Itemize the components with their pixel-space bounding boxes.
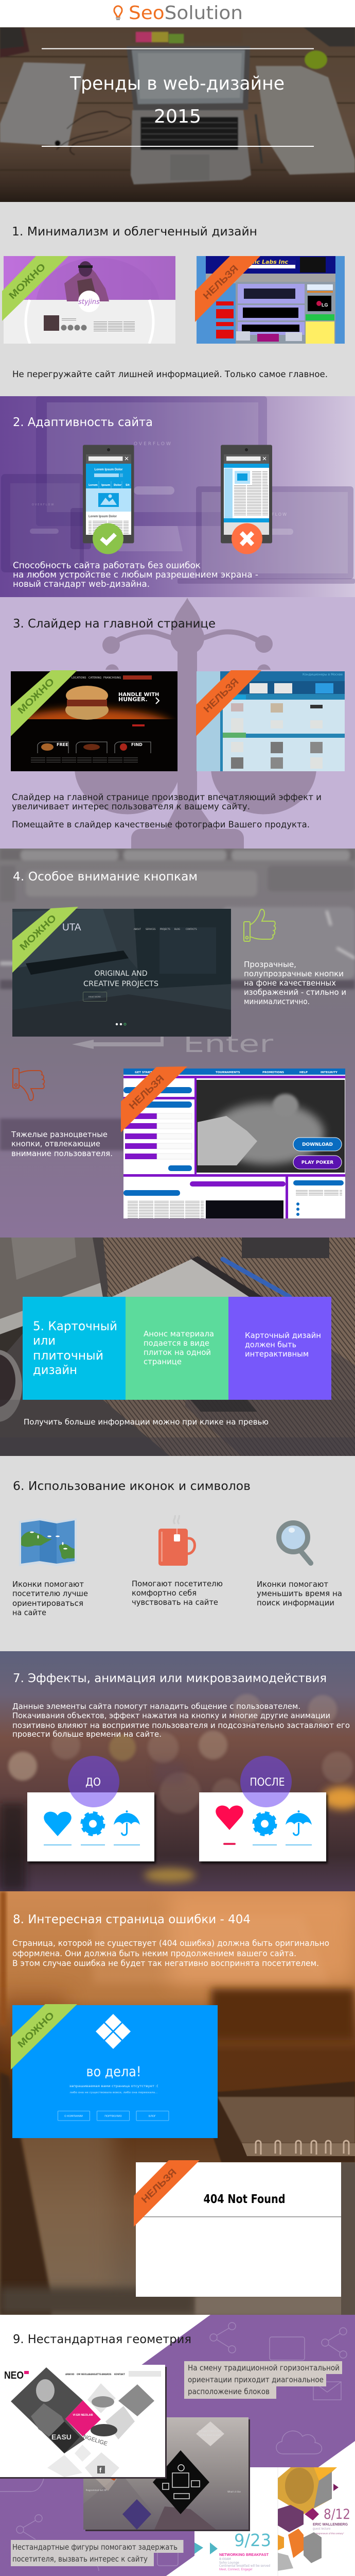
title: Тренды в web-дизайне	[69, 73, 285, 94]
icon: heart	[44, 1811, 72, 1836]
screenshot: transparent buttons site: READ MORE	[88, 995, 101, 998]
heading 1: 1. Минимализм и облегченный дизайн	[12, 225, 257, 239]
heading 6: 6. Использование иконок и символов	[13, 1480, 251, 1493]
ribbon: cannot: НЕЛЬЗЯ	[139, 2167, 179, 2206]
panel: 8 error page	[0, 1891, 355, 2508]
screenshot: NEO diamonds front: VI ER NEOLAB	[73, 2414, 93, 2417]
text: mug: чувствовать на сайте	[132, 1598, 218, 1607]
screenshot: mosaic layout back: 8:00AM	[219, 2557, 231, 2561]
panel: 4 buttons	[0, 849, 355, 1238]
ribbon: cannot	[196, 670, 261, 736]
text: magnifier: Иконки помогают	[257, 1580, 328, 1589]
text 7	[12, 1702, 350, 1739]
screenshot: cluttered conditioners store: Кондиционеры в Москве	[303, 673, 343, 676]
card: announce tile	[126, 1297, 228, 1400]
icon: cross badge	[232, 523, 262, 554]
panel: hero with desk photo	[0, 27, 355, 202]
text: thumb down: кнопки, отвлекающие	[11, 1139, 100, 1148]
screenshot: burger slider	[8, 671, 177, 771]
screenshot: creative 404: О КОМПАНИИ	[64, 2115, 83, 2118]
heading 3: 3. Слайдер на главной странице	[13, 617, 216, 631]
screenshot: plain 404: 404 Not Found	[204, 2193, 285, 2206]
icon: red heart	[216, 1805, 243, 1830]
icon: gear	[82, 1812, 104, 1835]
card: before	[27, 1792, 154, 1861]
screenshot: casino site with heavy buttons: PROMOTIONS	[262, 1071, 284, 1074]
icon: thumb up	[244, 909, 275, 941]
ribbon: can: МОЖНО	[7, 262, 48, 301]
text 8	[12, 1938, 329, 1968]
text 8: оформлена. Они должна быть неким продолжением вашего сайта.	[12, 1948, 296, 1958]
callout: figures	[11, 2540, 183, 2566]
text: magnifier: уменьшить время на	[257, 1589, 342, 1598]
background keyboard Enter legend	[72, 1030, 273, 1058]
text: thumb up: изображений - стильно и	[244, 988, 346, 997]
card: interactive tile: Карточный дизайн	[245, 1331, 321, 1340]
text: magnifier: поиск информации	[257, 1598, 334, 1607]
screenshot: burger slider: FRANCHISING	[103, 676, 121, 680]
screenshot: transparent buttons site: ABOUT	[134, 928, 141, 930]
screenshot: diamonds layout middle: What's it like	[227, 2490, 241, 2493]
screenshot: bad cluttered site: nic Labs Inc	[251, 259, 289, 265]
ribbon: cannot	[195, 256, 260, 322]
screenshot: NEO diamonds front	[0, 2365, 165, 2477]
text: thumb down: внимание пользователя.	[11, 1149, 113, 1158]
panel: 9 non-standard geometry	[0, 2315, 355, 2576]
text 3: Помещайте в слайдер качественые фотографи Вашего продукта.	[12, 820, 310, 829]
badge: after: ПОСЛЕ	[250, 1776, 285, 1788]
text: map: ориентироваться	[12, 1599, 83, 1608]
screenshot: transparent buttons site: CREATIVE PROJECTS	[83, 980, 158, 988]
badge: after	[240, 1756, 292, 1807]
text: map: на сайте	[12, 1608, 46, 1617]
screenshot: diamonds layout middle: at the meet so wait	[200, 2434, 220, 2436]
screenshot: NEO diamonds front: AWARDS	[101, 2373, 112, 2376]
text: thumb down: Тяжелые разноцветные	[11, 1130, 108, 1139]
icon: phone good layout: Lorem	[88, 484, 98, 487]
screenshot: casino site with heavy buttons: INTEGRITY	[321, 1071, 338, 1074]
callout: figures: Нестандартные фигуры помогают задержать	[12, 2543, 177, 2552]
ribbon: can	[12, 907, 78, 973]
text: mug: Помогают посетителю	[132, 1579, 223, 1588]
card: heading tile: 5. Карточный	[33, 1319, 117, 1333]
screenshot: burger slider: FREE	[57, 742, 68, 747]
ribbon: cannot: НЕЛЬЗЯ	[127, 1073, 167, 1112]
screenshot: mosaic layout back: Meet, Connect, Engage!	[219, 2568, 253, 2571]
title	[69, 73, 285, 127]
screenshot: mosaic layout back: Continental breakfast will be served	[219, 2564, 270, 2568]
screenshot: cluttered conditioners store	[197, 671, 345, 771]
screenshot: creative 404: БЛОГ	[149, 2115, 156, 2118]
text: mug: комфортно себя	[132, 1588, 197, 1598]
screenshot: creative 404: ПОРТФОЛИО	[104, 2115, 122, 2118]
card: announce tile: странице	[144, 1357, 182, 1366]
screenshot: mosaic layout back: NETWORKING BREAKFAST	[219, 2552, 269, 2557]
screenshot: mosaic layout back: Soho Lounge	[219, 2561, 239, 2565]
screenshot: casino site with heavy buttons: PLAY POKER	[301, 1160, 333, 1165]
background keyboard Enter legend: Enter	[183, 1030, 273, 1058]
screenshot: mosaic layout back	[194, 2467, 355, 2576]
screenshot: bad cluttered site	[197, 256, 345, 344]
card: heading tile: или	[33, 1333, 56, 1348]
screenshot: mosaic layout back: guest lecture	[313, 2528, 331, 2531]
text: thumb up: Прозрачные,	[244, 960, 296, 969]
ribbon: cannot: НЕЛЬЗЯ	[202, 676, 241, 715]
screenshot: NEO diamonds front: OM NEOLAB	[77, 2373, 91, 2376]
text: thumb down	[11, 1130, 113, 1158]
background scale icon	[75, 598, 316, 849]
screenshot: bad cluttered site: LG	[322, 302, 328, 308]
callout: diagonal	[184, 2361, 342, 2399]
heading 9: 9. Нестандартная геометрия	[13, 2333, 191, 2346]
text: mug	[132, 1579, 223, 1607]
screenshot: mosaic layout back: 9/23	[234, 2530, 271, 2550]
icon: phone good layout: Lorem Ipsum Dolor	[94, 468, 123, 471]
ribbon: can: МОЖНО	[16, 2010, 57, 2050]
caption 1: Не перегружайте сайт лишней информацией. Только самое главное.	[12, 369, 328, 379]
badge: before: ДО	[85, 1776, 101, 1788]
icon: map	[19, 1518, 77, 1566]
screenshot: diamonds layout middle	[83, 2417, 248, 2530]
card: announce tile: Анонс материала	[144, 1329, 214, 1338]
hero rule top	[42, 48, 314, 49]
screenshot: burger slider: HUNGER.	[118, 696, 148, 703]
text 2: на любом устройстве с любым разрешением экрана -	[13, 570, 258, 580]
panel: 3 slider	[0, 597, 355, 849]
ribbon: cannot	[134, 2160, 200, 2227]
background outline icons	[0, 2323, 347, 2571]
panel: 2 responsive	[0, 396, 355, 597]
text 7: провести больше времени на сайте.	[12, 1730, 162, 1739]
card: heading tile	[23, 1297, 126, 1400]
text 3	[12, 792, 322, 829]
ribbon: can	[11, 2004, 77, 2070]
icon: phone good layout: Ipsum	[101, 484, 110, 487]
screenshot: burger slider: CATERING	[88, 676, 101, 680]
logo text: SeoSolution	[129, 3, 243, 24]
icon: thumb down	[13, 1069, 44, 1100]
screenshot: transparent buttons site	[12, 909, 231, 1037]
screenshot: creative 404: либо она не существовала вовсе, либо она переехала...	[70, 2091, 158, 2094]
icon: gear	[254, 1812, 276, 1835]
text: map: посетителю лучше	[12, 1589, 88, 1598]
text: thumb up: на фоне качественных	[244, 978, 336, 988]
screenshot: burger slider: LOCATIONS	[72, 676, 86, 680]
text 8: В этом случае ошибка не будет так негативно воспринята посетителем.	[12, 1958, 319, 1968]
ribbon: can: МОЖНО	[18, 913, 59, 953]
text 7: Покачивания объектов, эффект нажатия на кнопку и многие другие анимации	[12, 1711, 330, 1720]
text 3: Слайдер на главной странице производит впечатляющий эффект и	[12, 792, 322, 802]
icon: phone good layout: Lorem Ipsum Dolor	[88, 515, 117, 518]
background keyboard photo	[0, 849, 355, 1150]
title: 2015	[154, 106, 201, 127]
card: after	[199, 1792, 326, 1861]
card: announce tile: подается в виде	[144, 1338, 209, 1348]
icon underlines	[44, 1844, 140, 1845]
header: logo bar	[0, 0, 355, 27]
callout: diagonal: ориентации приходит диагональное	[188, 2375, 324, 2384]
screenshot: transparent buttons site: PROJECTS	[160, 928, 170, 930]
card: heading tile: дизайн	[33, 1363, 77, 1377]
shadow under diamonds image	[85, 2419, 250, 2531]
icon: magnifier	[279, 1523, 311, 1563]
panel: 5 card design	[0, 1238, 355, 1456]
text 2: новый стандарт web-дизайна.	[13, 579, 150, 589]
screenshot: NEO diamonds front: EASU	[51, 2433, 72, 2441]
ribbon: cannot	[121, 1066, 187, 1132]
icon underlines	[253, 1844, 312, 1845]
text 2	[13, 561, 258, 589]
screenshot: mosaic layout back: "entrepreneurs of this century"	[313, 2532, 344, 2535]
screenshot: casino site with heavy buttons: DOWNLOAD	[302, 1142, 333, 1147]
text: thumb up	[244, 960, 346, 1006]
ribbon: can	[2, 256, 68, 321]
icon: umbrella	[114, 1810, 140, 1835]
heading 8: 8. Интересная страница ошибки - 404	[13, 1913, 251, 1926]
screenshot: good minimal site: styjins	[78, 298, 100, 306]
callout: figures: посетителя, вызвать интерес к сайту	[12, 2554, 148, 2564]
screenshot: plain 404	[136, 2162, 341, 2297]
screenshot: NEO diamonds front: NEO	[4, 2370, 24, 2381]
screenshot: creative 404: запрашиваемая вами страница отсутствует :(	[69, 2084, 158, 2088]
badge: before	[68, 1756, 119, 1807]
icon: phone good layout: Sit	[126, 484, 130, 487]
screenshot: NEO diamonds front: f	[99, 2466, 102, 2474]
heading 7: 7. Эффекты, анимация или микровзаимодействия	[13, 1672, 327, 1685]
card: announce tile: плиток на одной	[144, 1348, 211, 1357]
text 7: позитивно влияют на восприятие пользователя и подсознательно заставляют его	[12, 1721, 350, 1730]
ribbon: can	[11, 670, 77, 736]
icon: mug	[158, 1515, 194, 1566]
screenshot: transparent buttons site: CONTACTS	[186, 928, 197, 930]
panel: 6 icons and symbols	[12, 1480, 342, 1617]
text: magnifier	[257, 1580, 342, 1607]
screenshot: transparent buttons site: SERVICES	[146, 928, 156, 930]
screenshot: NEO diamonds front: ARBOID	[65, 2373, 75, 2376]
screenshot: casino site with heavy buttons: HELP	[299, 1071, 308, 1074]
icon: umbrella	[286, 1810, 312, 1835]
text 7: Данные элементы сайта помогут наладить общение с пользователем.	[12, 1702, 300, 1711]
ribbon: cannot: НЕЛЬЗЯ	[201, 263, 241, 302]
screenshot: casino site with heavy buttons: TOURNAMENTS	[216, 1071, 240, 1074]
screenshot: NEO diamonds front: ANSATTE	[91, 2373, 101, 2376]
screenshot: NEO diamonds front: KONTAKT	[114, 2373, 125, 2376]
panel: 1 minimalism	[2, 225, 345, 379]
shadow under NEO image	[0, 2367, 167, 2479]
screenshot: diamonds layout middle: Programmed last XP	[86, 2489, 107, 2492]
screenshot: creative 404	[12, 2005, 218, 2138]
screenshot: diamonds layout middle: manager's dad is here	[199, 2430, 222, 2432]
background devices: OVERFLOW	[134, 442, 172, 447]
text 8: Страница, которой не существует (404 ошибка) должна быть оригинально	[12, 1938, 329, 1948]
text: map	[12, 1580, 88, 1617]
hero rule bottom	[42, 146, 314, 147]
card: interactive tile: интерактивным	[245, 1349, 309, 1359]
screenshot: casino site with heavy buttons	[123, 1069, 345, 1218]
screenshot: creative 404: во дела!	[86, 2064, 141, 2080]
background devices	[1, 396, 355, 584]
icon: light bulb logo	[114, 6, 122, 20]
panel: 7 effects	[0, 1651, 355, 2508]
background devices: OVERFLOW	[32, 503, 55, 506]
screenshot: mosaic layout back: ERIC WALLENBERG	[313, 2522, 348, 2527]
background devices: FLOW	[272, 512, 288, 517]
background desk photo	[0, 1238, 355, 1456]
card: heading tile: плиточный	[33, 1348, 103, 1363]
background bokeh	[0, 1694, 355, 1891]
icon: check badge	[93, 523, 123, 554]
icon: phone good layout	[83, 445, 134, 554]
screenshot: burger slider: HANDLE WITH	[118, 692, 159, 698]
red dash	[223, 1843, 236, 1845]
text: thumb up: полупрозрачные кнопки	[244, 969, 344, 978]
text: thumb up: минималистично.	[244, 997, 310, 1006]
text 3: увеличивает интерес пользователя к вашему сайту.	[12, 802, 250, 811]
ribbon: can: МОЖНО	[16, 676, 57, 716]
screenshot: NEO diamonds front: NGELIGE	[82, 2433, 108, 2447]
text: map: Иконки помогают	[12, 1580, 84, 1589]
callout: diagonal: расположение блоков	[188, 2387, 270, 2396]
heading 2: 2. Адаптивность сайта	[13, 416, 153, 429]
screenshot: mosaic layout back: 8/12	[324, 2506, 350, 2522]
heading 4: 4. Особое внимание кнопкам	[13, 870, 198, 884]
screenshot: good minimal site	[4, 256, 175, 350]
screenshot: transparent buttons site: UTA	[62, 922, 81, 933]
screenshot: casino site with heavy buttons: GET STARTED	[135, 1071, 156, 1074]
icon: phone good layout: Dolor	[114, 484, 122, 487]
card: interactive tile	[228, 1297, 331, 1400]
caption 5: Получить больше информации можно при клике на превью	[24, 1417, 269, 1427]
screenshot: burger slider: FIND	[131, 742, 143, 747]
background blurred desk	[0, 1891, 355, 2315]
text 2: Способность сайта работать без ошибок	[13, 561, 201, 571]
icon: phone bad layout	[221, 445, 272, 554]
screenshot: transparent buttons site: BLOG	[174, 928, 180, 930]
screenshot: transparent buttons site: ORIGINAL AND	[95, 970, 147, 978]
card: interactive tile: должен быть	[245, 1340, 296, 1349]
